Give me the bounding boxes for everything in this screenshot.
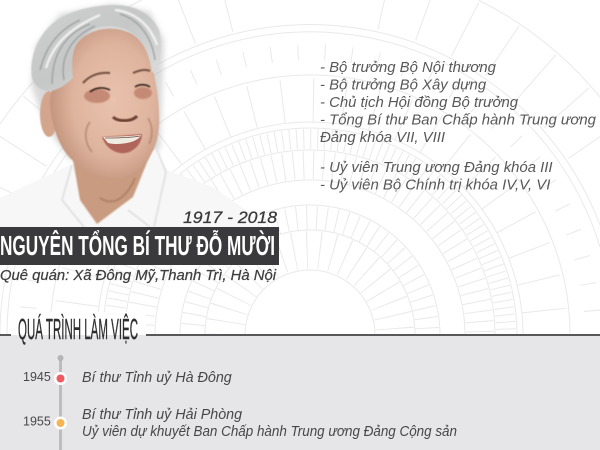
ear — [40, 91, 58, 137]
smile lines — [86, 118, 152, 152]
panel: career timeline background — [0, 335, 600, 450]
entry 1955 — [23, 407, 457, 440]
positions list — [320, 60, 597, 194]
entry 1945: 1945 — [23, 370, 51, 384]
entry 1955: Uỷ viên dự khuyết Ban Chấp hành Trung ương Đảng Cộng sản — [82, 424, 457, 440]
portrait shadow — [31, 4, 164, 160]
shirt — [0, 150, 262, 227]
section heading: career — [0, 312, 600, 346]
entry 1945: Bí thư Tỉnh uỷ Hà Đông — [82, 370, 232, 386]
portrait of Đỗ Mười — [0, 4, 262, 227]
neck — [73, 155, 150, 224]
entry 1955: 1955 — [23, 414, 51, 428]
background: bronze drum line pattern — [0, 0, 600, 335]
nose — [113, 116, 137, 121]
positions list: - Tổng Bí thư Ban Chấp hành Trung ương — [320, 112, 597, 128]
eyes — [83, 70, 150, 83]
hair — [31, 5, 161, 91]
years of life: 1917 - 2018 — [183, 208, 278, 227]
entry 1955: Bí thư Tỉnh uỷ Hải Phòng — [82, 407, 242, 423]
face — [50, 29, 159, 178]
positions list: - Bộ trưởng Bộ Nội thương — [320, 60, 497, 76]
name banner — [0, 227, 279, 265]
positions list: - Uỷ viên Bộ Chính trị khóa IV,V, VI — [320, 178, 550, 194]
positions list: - Uỷ viên Trung ương Đảng khóa III — [320, 160, 553, 176]
timeline — [23, 355, 457, 450]
mouth — [102, 134, 142, 153]
positions list: Đảng khóa VII, VIII — [320, 130, 445, 146]
positions list: - Bộ trưởng Bộ Xây dựng — [320, 78, 487, 94]
hometown: Quê quán: Xã Đông Mỹ,Thanh Trì, Hà Nội — [0, 268, 277, 284]
positions list: - Chủ tịch Hội đồng Bộ trưởng — [320, 95, 519, 111]
section heading: career: QUÁ TRÌNH LÀM VIỆC — [18, 313, 138, 346]
timeline rail — [58, 355, 64, 450]
name text: NGUYÊN TỔNG BÍ THƯ ĐỖ MƯỜI — [0, 230, 275, 261]
